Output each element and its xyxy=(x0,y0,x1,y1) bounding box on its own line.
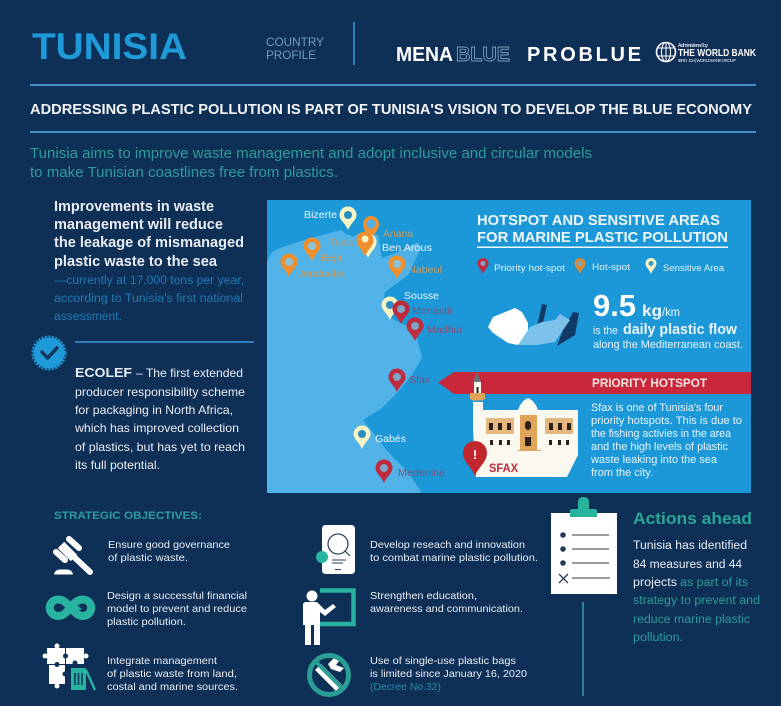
intro text: to make Tunisian coastlines free from plastics. xyxy=(30,164,338,181)
text block: waste management: according to Tunisia's first national xyxy=(54,293,243,305)
illustration: Sfax mosque xyxy=(463,372,578,477)
stat: 9.5 kg/km: /km xyxy=(662,305,680,319)
legend: Priority hot-spot xyxy=(494,263,565,274)
objective: integrate management: of plastic waste from land, xyxy=(107,668,237,680)
objective: single-use bags xyxy=(370,655,527,693)
panel: actions ahead: as part of its xyxy=(680,577,748,589)
panel: hotspot map xyxy=(267,200,751,493)
text block: waste management xyxy=(54,199,244,323)
icon: phone and magnifier xyxy=(316,525,355,574)
text block: ECOLEF: – The first extended xyxy=(136,366,243,380)
panel: actions ahead: strategy to prevent and xyxy=(633,595,760,607)
objective: research: to combat marine plastic pollution. xyxy=(370,552,538,564)
text block: Sfax description xyxy=(590,402,742,479)
objective: education xyxy=(370,590,523,615)
map labels: Medenine xyxy=(398,467,445,479)
logo: The World Bank: THE WORLD BANK xyxy=(678,48,757,59)
illustration: Sfax mosque: SFAX xyxy=(489,463,518,475)
map labels: Ariana xyxy=(383,228,413,240)
map pin: Sousse xyxy=(382,296,398,320)
text block: waste management: —currently at 17,000 tons per year, xyxy=(54,275,244,287)
map labels: Ben Arous xyxy=(382,242,432,254)
text block: ECOLEF: its full potential. xyxy=(75,458,160,472)
legend: Sensitive Area xyxy=(663,263,725,274)
map labels: Jendouba xyxy=(298,268,345,280)
text block: Sfax description: waste leaking into the sea xyxy=(590,454,718,466)
title: TUNISIA xyxy=(32,26,187,67)
stat: 9.5 kg/km: kg xyxy=(642,303,662,320)
objective: single-use bags: Use of single-use plastic bags xyxy=(370,655,516,667)
icon: no plastic bags xyxy=(310,656,348,694)
panel: actions ahead: Tunisia has identified xyxy=(633,540,747,552)
panel: actions ahead: projects xyxy=(633,577,677,589)
arrow: priority hotspot banner xyxy=(438,372,751,394)
map labels: Sousse xyxy=(404,290,439,302)
stat: 9.5 kg/km: along the Mediterranean coast. xyxy=(593,339,743,351)
text block: ECOLEF: producer responsibility scheme xyxy=(75,385,245,399)
objective: financial model: Design a successful financial xyxy=(107,590,247,602)
map labels: Monastir xyxy=(412,305,454,317)
intro text: Tunisia aims to improve waste management and adopt inclusive and circular models xyxy=(30,145,592,162)
text block: ECOLEF xyxy=(74,365,245,472)
map pin: Jendouba xyxy=(280,254,298,277)
panel: actions ahead: 84 measures and 44 xyxy=(633,559,743,571)
text block: waste management: assessment. xyxy=(54,311,122,323)
icon: teacher and board xyxy=(303,590,354,645)
map heading: FOR MARINE PLASTIC POLLUTION xyxy=(477,229,728,246)
icon: clipboard xyxy=(551,497,617,594)
map labels xyxy=(298,209,462,479)
text block: waste management: the leakage of mismanaged xyxy=(54,235,244,251)
icon: gavel xyxy=(54,539,90,574)
map: Tunisia land xyxy=(267,229,422,493)
text block: waste management: Improvements in waste xyxy=(54,199,214,215)
stat: 9.5 kg/km xyxy=(593,288,743,351)
logo: The World Bank: Administered by xyxy=(678,43,708,49)
text block: ECOLEF: for packaging in North Africa, xyxy=(75,403,233,417)
country profile label xyxy=(266,35,324,62)
strategic objectives heading: STRATEGIC OBJECTIVES: xyxy=(54,510,202,522)
intro text xyxy=(30,145,592,181)
icon: plastic bag xyxy=(488,304,579,346)
objective: education: awareness and communication. xyxy=(370,603,523,615)
map labels: Gabés xyxy=(375,433,406,445)
map pin: Nabeul xyxy=(388,256,406,279)
text block: ECOLEF: of plastics, but has yet to reach xyxy=(75,440,245,454)
stat: 9.5 kg/km: daily plastic flow xyxy=(623,321,737,338)
logo: PROBLUE: PROBLUE xyxy=(527,44,641,66)
map pin: Monastir xyxy=(392,300,410,324)
icon: puzzle and bin xyxy=(42,644,95,690)
legend xyxy=(478,258,725,274)
text block: waste management: management will reduce xyxy=(54,217,223,233)
icon: infinity loop xyxy=(50,600,91,616)
icon: check badge xyxy=(32,336,66,370)
panel: actions ahead: Actions ahead xyxy=(633,509,752,528)
panel: actions ahead: reduce marine plastic xyxy=(633,614,750,626)
map pin: Medenine xyxy=(376,460,392,483)
map pin: Madhia xyxy=(406,318,424,341)
map pin: Sfax xyxy=(388,368,406,392)
objective: financial model xyxy=(107,590,247,628)
objective: financial model: model to prevent and reduce xyxy=(107,603,247,615)
objective: governance: of plastic waste. xyxy=(108,552,188,564)
map labels: Bizerte xyxy=(304,209,337,221)
logo: MENA Blue xyxy=(396,44,510,66)
map labels: Nabeul xyxy=(408,264,442,276)
map labels: Madhia xyxy=(427,324,462,336)
text block: Sfax description: priority hotspots. This is due to xyxy=(591,415,742,427)
map labels: Sfax xyxy=(409,374,431,386)
objective: single-use bags: (Decree No.32) xyxy=(370,681,441,693)
legend: Hot-spot xyxy=(592,262,630,273)
illustration: Sfax mosque: ! xyxy=(473,447,477,462)
logo: The World Bank xyxy=(656,42,757,63)
map pin: Ben Arous sensitive xyxy=(360,234,376,258)
headline: ADDRESSING PLASTIC POLLUTION IS PART OF TUNISIA'S VISION TO DEVELOP THE BLUE ECONOMY xyxy=(30,101,752,118)
stat: 9.5 kg/km: is the xyxy=(593,325,618,337)
map heading xyxy=(477,212,728,246)
text block: ECOLEF: which has improved collection xyxy=(74,421,239,435)
objective: governance xyxy=(108,539,230,564)
objective: governance: Ensure good governance xyxy=(108,539,230,551)
panel: actions ahead xyxy=(633,509,760,644)
logo: The World Bank: IBRD · IDA | WORLD BANK GROUP xyxy=(678,58,736,63)
map heading: HOTSPOT AND SENSITIVE AREAS xyxy=(477,212,720,229)
text block: Sfax description: the fishing activies in the area xyxy=(591,428,732,440)
map pin: Gabes xyxy=(354,426,370,449)
country profile label: COUNTRY xyxy=(266,35,324,49)
objective: integrate management xyxy=(107,655,238,693)
objective: single-use bags: is limited since January 16, 2020 xyxy=(370,668,527,680)
map pin: Bizerte xyxy=(340,206,356,230)
map pin: Tunis xyxy=(356,232,374,256)
text block: Sfax description: Sfax is one of Tunisia's four xyxy=(591,402,723,414)
map labels: Beja xyxy=(321,252,342,264)
map pin: Beja xyxy=(304,238,320,261)
objective: integrate management: Integrate management xyxy=(107,655,217,667)
arrow: priority hotspot banner: PRIORITY HOTSPOT xyxy=(592,376,708,390)
logo: MENA Blue: BLUE xyxy=(456,44,510,66)
objective: research: Develop reseach and innovation xyxy=(370,539,525,551)
stat: 9.5 kg/km: 9.5 xyxy=(593,288,636,323)
objective: education: Strengthen education, xyxy=(370,590,477,602)
map labels: Tunis xyxy=(330,237,353,249)
logo: MENA Blue: MENA xyxy=(396,44,453,66)
text block: ECOLEF: ECOLEF xyxy=(75,365,132,380)
country profile label: PROFILE xyxy=(266,48,316,62)
text block: Sfax description: and the high levels of plastic xyxy=(591,441,728,453)
header xyxy=(32,22,757,67)
map pin: Ariana xyxy=(363,216,379,240)
text block: waste management: plastic waste to the sea xyxy=(54,254,218,270)
objective: integrate management: costal and marine sources. xyxy=(107,681,238,693)
objective: research xyxy=(370,539,538,564)
panel: actions ahead: pollution. xyxy=(633,632,683,644)
text block: Sfax description: from the city. xyxy=(591,467,653,479)
objective: financial model: plastic pollution. xyxy=(107,616,186,628)
